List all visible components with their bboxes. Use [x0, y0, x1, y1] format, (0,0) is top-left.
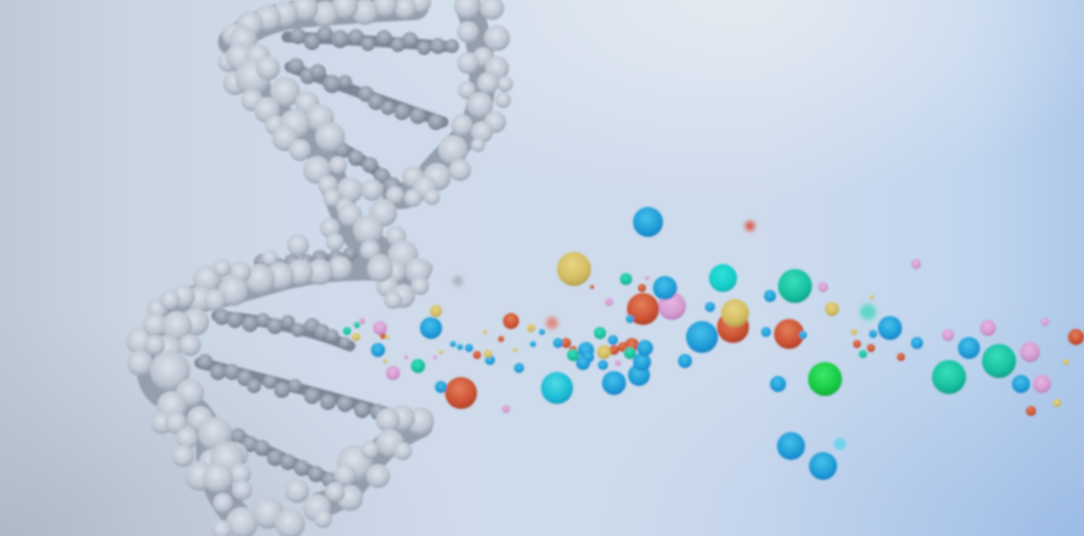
lower backbone strands [126, 256, 434, 536]
DNA helix [126, 0, 513, 536]
rung beads [197, 26, 459, 488]
blurred red molecules [546, 221, 755, 329]
green molecule [808, 362, 842, 396]
helix core shading [150, 6, 482, 520]
rungs of the helix [200, 37, 453, 478]
blue molecules [371, 207, 1030, 480]
pale cyan molecule [834, 438, 846, 450]
aqua molecule [709, 264, 737, 292]
teal molecules [343, 269, 1016, 394]
upper backbone strands [218, 0, 513, 309]
blurred grey molecule [453, 276, 463, 286]
blurred teal molecule [860, 304, 876, 320]
yellow molecules [352, 252, 1069, 407]
molecules stream [343, 207, 1084, 480]
cyan molecules [541, 372, 573, 404]
pink molecules [359, 259, 1051, 413]
red molecules [380, 284, 1084, 416]
